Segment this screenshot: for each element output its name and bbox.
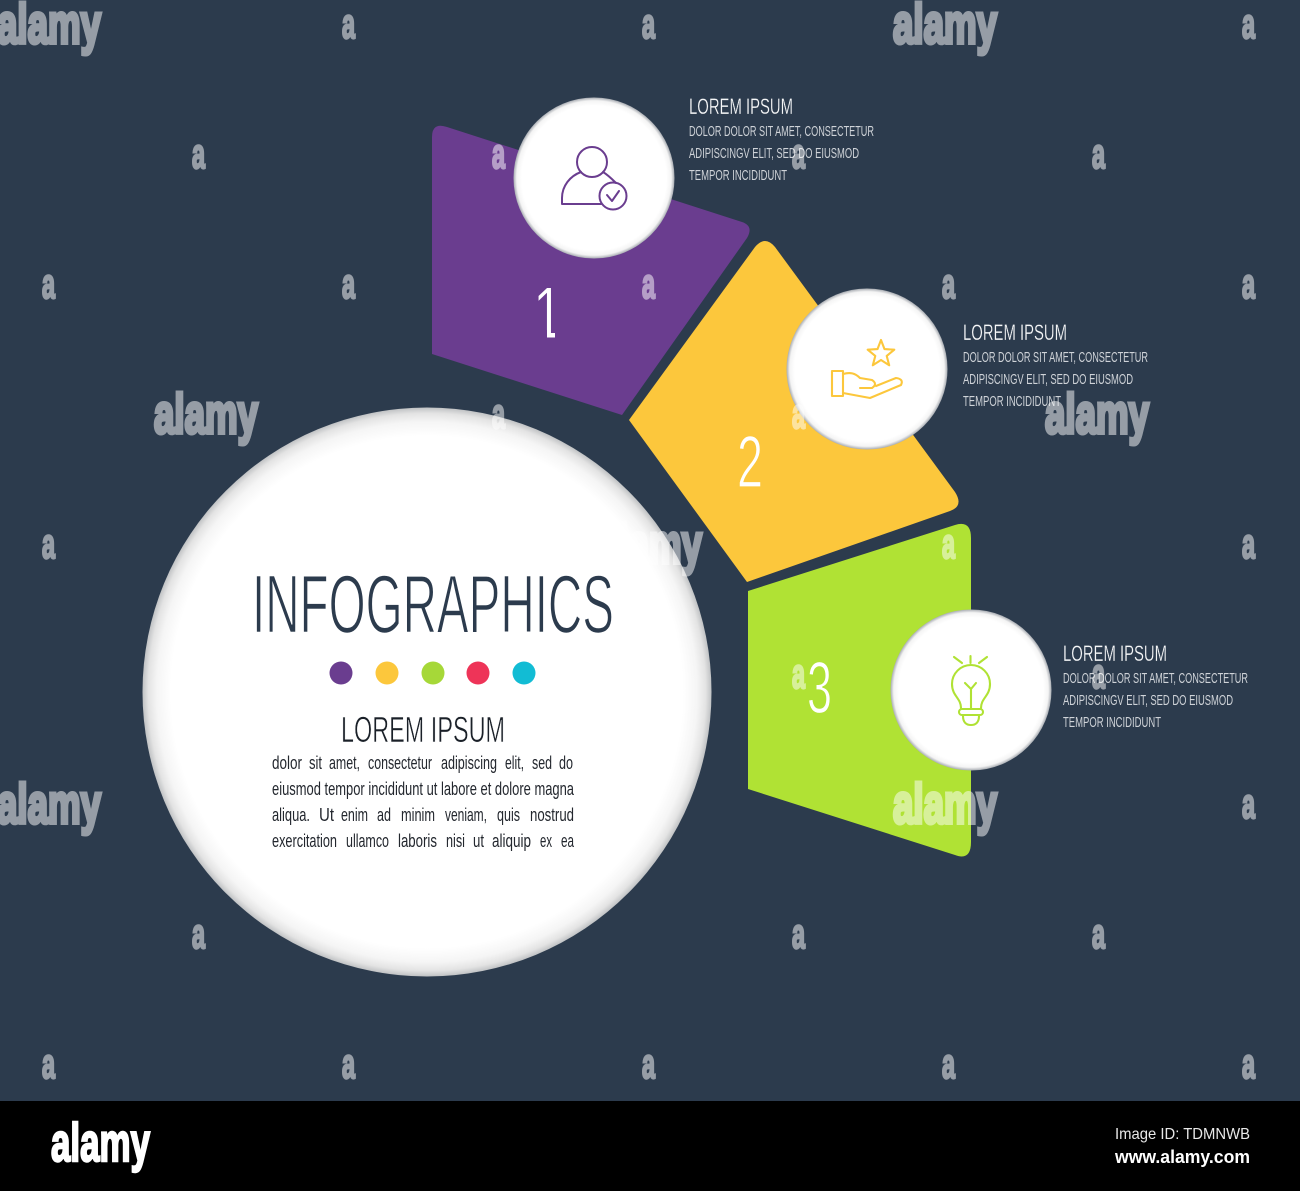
watermark overlay: a xyxy=(342,0,355,47)
body text: enim xyxy=(341,805,368,825)
watermark overlay: a xyxy=(642,260,655,307)
number 2: 2 xyxy=(737,422,763,503)
watermark overlay: a xyxy=(42,260,55,307)
text block 1: ADIPISCINGV ELIT, SED DO EIUSMOD xyxy=(689,146,859,162)
watermark overlay: a xyxy=(792,390,805,437)
body text: laboris xyxy=(398,831,437,851)
body text: nostrud xyxy=(530,805,574,825)
watermark overlay: a xyxy=(1092,650,1105,697)
body text: elit, xyxy=(505,753,524,773)
watermark overlay: a xyxy=(42,1040,55,1087)
text block 2: DOLOR DOLOR SIT AMET, CONSECTETUR xyxy=(963,350,1148,366)
icon circle 3 xyxy=(890,610,1052,770)
text block 3 xyxy=(1063,641,1248,731)
watermark overlay: a xyxy=(492,130,505,177)
body text: consectetur xyxy=(368,753,432,773)
watermark overlay: a xyxy=(792,910,805,957)
body text: quis xyxy=(497,805,520,825)
body text xyxy=(272,753,575,851)
watermark overlay: a xyxy=(1242,1040,1255,1087)
body text: sed xyxy=(532,753,552,773)
watermark overlay: a xyxy=(942,260,955,307)
body text: ullamco xyxy=(346,831,389,851)
footer logo: alamy xyxy=(51,1113,150,1173)
icon: hand with star xyxy=(832,340,902,398)
panel: segment 3 green xyxy=(748,524,971,856)
icon: user with check xyxy=(562,147,626,210)
watermark overlay: a xyxy=(192,130,205,177)
watermark overlay: a xyxy=(1242,0,1255,47)
body text: eiusmod tempor incididunt ut labore et dolore magna xyxy=(272,779,575,799)
body text: adipiscing xyxy=(441,753,497,773)
watermark overlay: alamy xyxy=(1045,382,1149,445)
watermark overlay: a xyxy=(192,910,205,957)
body text: ea xyxy=(561,831,575,851)
image id: Image ID: TDMNWB xyxy=(1115,1126,1250,1143)
text block 2: LOREM IPSUM xyxy=(963,320,1067,345)
body text: aliqua. xyxy=(272,805,310,825)
text block 1 xyxy=(689,94,874,184)
text block 2 xyxy=(963,320,1148,410)
watermark overlay: a xyxy=(1242,780,1255,827)
icon circle 2 xyxy=(786,288,948,450)
watermark overlay: a xyxy=(1092,130,1105,177)
body text: Ut xyxy=(319,805,334,825)
watermark overlay: alamy xyxy=(154,382,258,445)
body text: aliquip xyxy=(492,831,531,851)
text block 1: LOREM IPSUM xyxy=(689,94,793,119)
body text: dolor xyxy=(272,753,302,773)
text block 3: TEMPOR INCIDIDUNT xyxy=(1063,715,1161,731)
watermark overlay: a xyxy=(342,260,355,307)
panel: segment 2 yellow xyxy=(629,241,959,582)
body text: nisi xyxy=(446,831,465,851)
text block 1: DOLOR DOLOR SIT AMET, CONSECTETUR xyxy=(689,124,874,140)
watermark overlay: a xyxy=(942,520,955,567)
watermark overlay: a xyxy=(42,520,55,567)
watermark overlay: a xyxy=(792,130,805,177)
central circle panel xyxy=(142,408,712,976)
body text: exercitation xyxy=(272,831,337,851)
body text: minim xyxy=(401,805,435,825)
text block 2: TEMPOR INCIDIDUNT xyxy=(963,394,1061,410)
watermark overlay: a xyxy=(1092,910,1105,957)
body text: ad xyxy=(377,805,391,825)
icon: light bulb xyxy=(952,656,990,725)
icon circle 1 xyxy=(514,98,674,258)
number 1: 1 xyxy=(533,273,563,354)
panel: segment 1 purple xyxy=(432,126,750,415)
watermark overlay: a xyxy=(492,390,505,437)
body text: ex xyxy=(540,831,552,851)
watermark overlay: a xyxy=(792,650,805,697)
subheading: LOREM IPSUM xyxy=(341,709,505,750)
watermark overlay: alamy xyxy=(0,772,101,835)
watermark overlay: a xyxy=(1242,520,1255,567)
body text: ut xyxy=(473,831,484,851)
text block 3: LOREM IPSUM xyxy=(1063,641,1167,666)
body text: do xyxy=(559,753,573,773)
watermark overlay: a xyxy=(1242,260,1255,307)
watermark overlay: a xyxy=(642,0,655,47)
site url: www.alamy.com xyxy=(1114,1147,1250,1167)
footer bar xyxy=(0,1101,1300,1191)
body text: veniam, xyxy=(445,805,487,825)
watermark overlay: alamy xyxy=(893,772,997,835)
watermark overlay: a xyxy=(642,1040,655,1087)
text block 2: ADIPISCINGV ELIT, SED DO EIUSMOD xyxy=(963,372,1133,388)
number 3: 3 xyxy=(807,648,832,729)
colour dots xyxy=(330,662,536,684)
text block 1: TEMPOR INCIDIDUNT xyxy=(689,168,787,184)
body text: amet, xyxy=(329,753,360,773)
watermark overlay: a xyxy=(942,1040,955,1087)
watermark overlay: alamy xyxy=(598,512,702,575)
body text: sit xyxy=(309,753,322,773)
title: INFOGRAPHICS xyxy=(252,558,614,650)
watermark overlay: a xyxy=(342,1040,355,1087)
